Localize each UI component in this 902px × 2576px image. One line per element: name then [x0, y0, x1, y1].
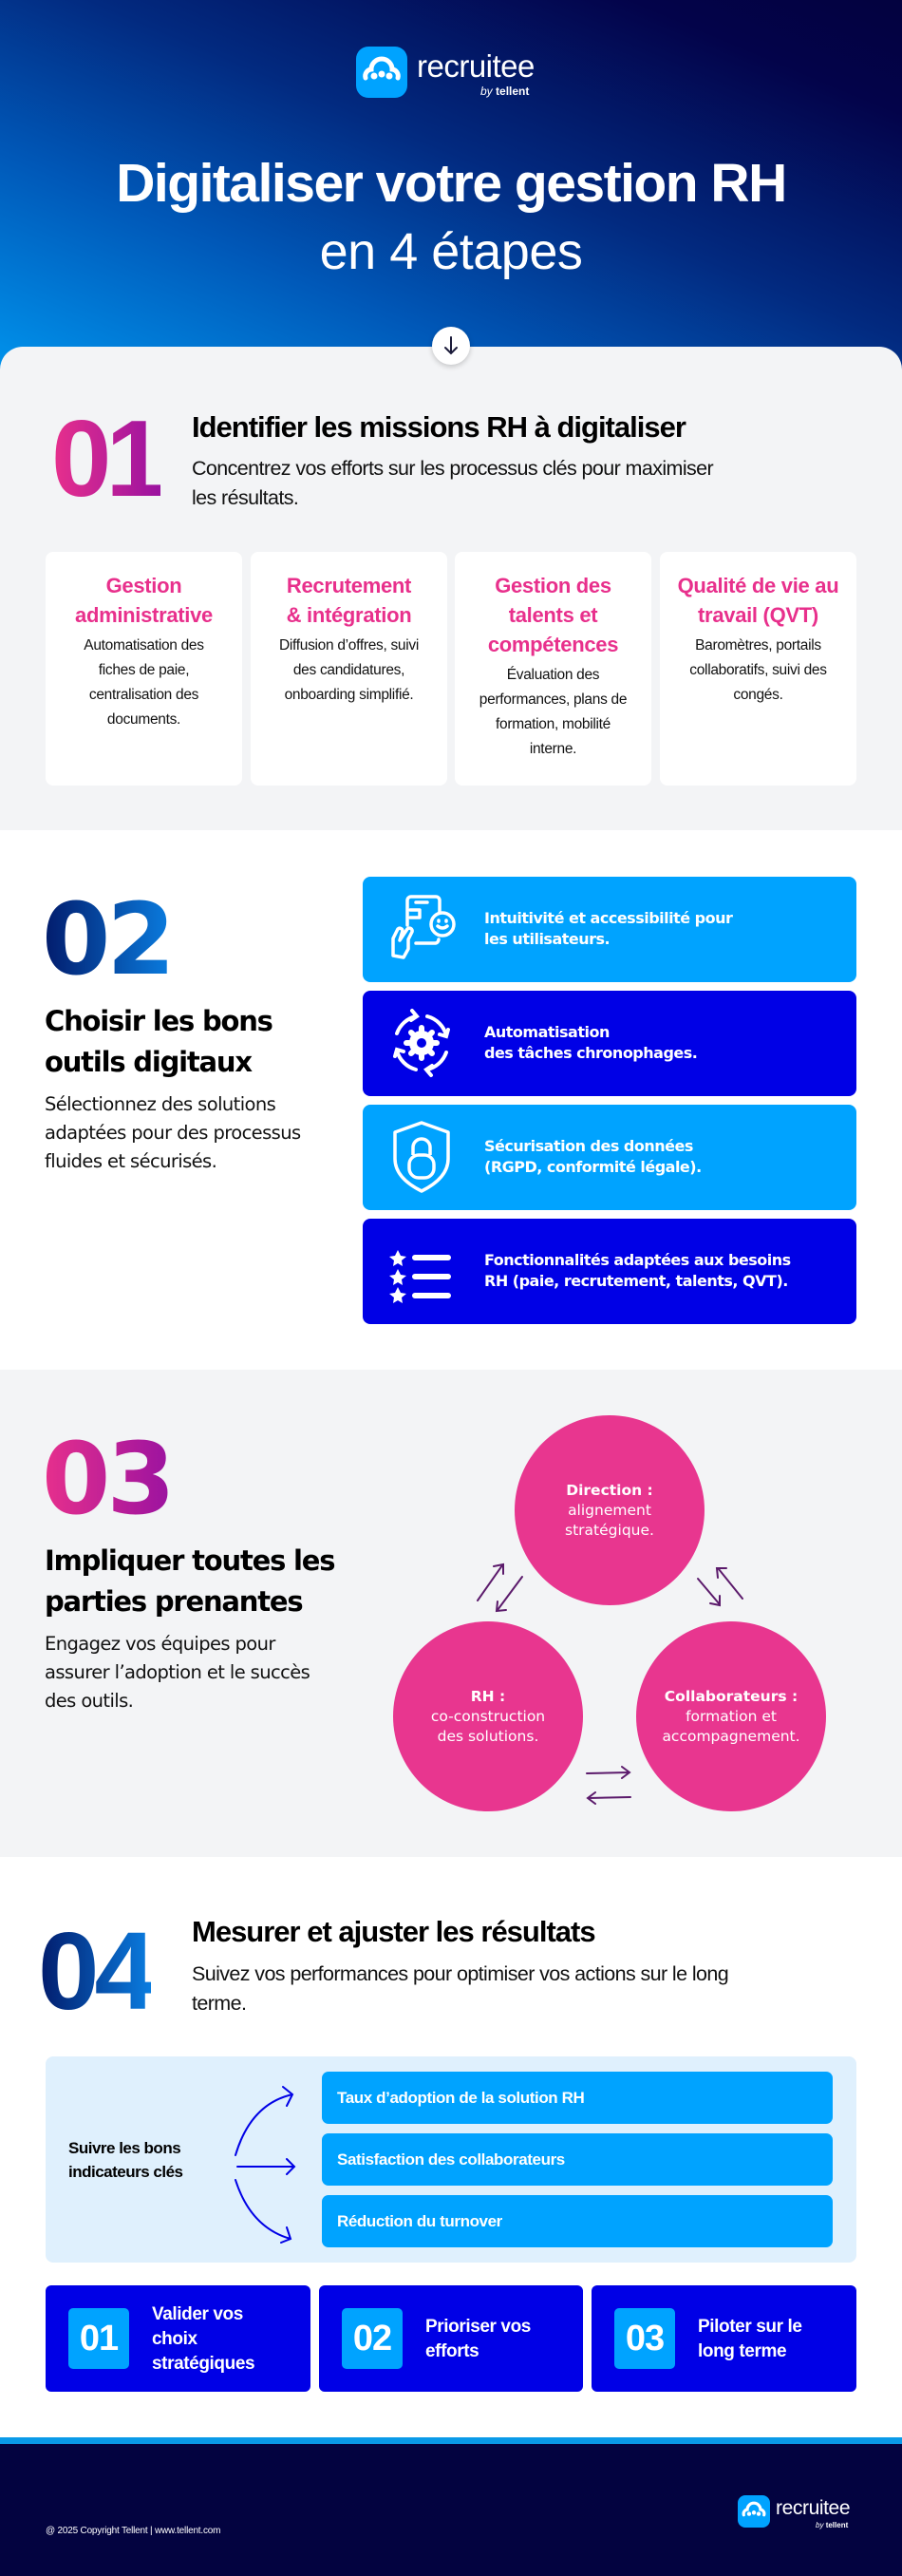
bar: satisfaction: [322, 2133, 833, 2186]
circle: direction: [515, 1415, 705, 1605]
card: talents: performances, plans de: [479, 691, 627, 708]
tool: fonctionnalités: Fonctionnalités adaptées aux besoins: [484, 1251, 791, 1269]
card: prioriser: [319, 2285, 583, 2392]
text 03: assurer l’adoption et le succès: [45, 1661, 310, 1683]
tool: sécurisation: [363, 1105, 856, 1210]
circle: collaborateurs: [636, 1621, 826, 1811]
tool: intuitivité: [363, 877, 856, 982]
card: recrutement: onboarding simplifié.: [285, 687, 413, 703]
card: talents: Évaluation des: [507, 667, 599, 683]
circle: direction: Direction :: [566, 1482, 653, 1499]
card: piloter: [592, 2285, 856, 2392]
card: valider: stratégiques: [152, 2354, 254, 2374]
footer: [0, 2437, 902, 2576]
heading 03: parties prenantes: [45, 1585, 302, 1618]
text 03: Engagez vos équipes pour: [45, 1633, 275, 1655]
logo: footer: [738, 2495, 850, 2529]
circle: collaborateurs: Collaborateurs :: [665, 1687, 798, 1704]
card: talents: interne.: [530, 741, 576, 757]
tool: automatisation: [363, 991, 856, 1096]
heading 02: outils digitaux: [45, 1046, 252, 1078]
card: valider: choix: [152, 2329, 197, 2349]
card: recrutement: [251, 552, 447, 786]
arrows: branches: [235, 2086, 296, 2244]
tool: intuitivité: Intuitivité et accessibilité pour: [484, 909, 732, 927]
card: QVT: Baromètres, portails: [695, 637, 821, 653]
circle: direction: alignement: [568, 1501, 651, 1518]
heading 03: [45, 1544, 334, 1618]
bar: turnover: [322, 2195, 833, 2247]
card: QVT: collaboratifs, suivi des: [689, 662, 827, 678]
logo: recruitee: by tellent: [480, 85, 529, 98]
card: recrutement: & intégration: [287, 603, 411, 627]
panel: section 1: [0, 347, 902, 830]
label: suivre: [68, 2139, 183, 2181]
card: talents: compétences: [488, 633, 618, 656]
card: talents: formation, mobilité: [496, 716, 611, 732]
tool: sécurisation: Sécurisation des données: [484, 1137, 693, 1155]
circle: RH: [393, 1621, 583, 1811]
heading 04: Mesurer et ajuster les résultats: [192, 1915, 595, 1948]
tool: fonctionnalités: [363, 1219, 856, 1324]
text 02: Sélectionnez des solutions: [45, 1093, 275, 1115]
text 03: [45, 1633, 310, 1712]
circle: RH: des solutions.: [438, 1727, 538, 1744]
logo: footer: by tellent: [816, 2521, 848, 2529]
number 04: 04: [38, 1909, 151, 2033]
card: valider: Valider vos: [152, 2304, 243, 2324]
card: gestion administrative: centralisation des: [89, 687, 198, 703]
header background: [0, 0, 902, 380]
text 04: terme.: [192, 1992, 246, 2015]
label: suivre: indicateurs clés: [68, 2163, 183, 2181]
card: QVT: [660, 552, 856, 786]
number 02: 02: [42, 881, 172, 997]
icon: logo cloud: [356, 47, 407, 98]
arrows: cycle: [477, 1563, 743, 1805]
text 04: Suivez vos performances pour optimiser vos actions sur le long: [192, 1962, 728, 1985]
heading 01: Identifier les missions RH à digitaliser: [192, 410, 686, 444]
card: gestion administrative: documents.: [107, 711, 180, 728]
tool: automatisation: Automatisation: [484, 1023, 610, 1041]
heading 02: [45, 1005, 272, 1078]
card: QVT: congés.: [733, 687, 783, 703]
card: talents: [455, 552, 651, 786]
logo: footer: recruitee: [776, 2497, 850, 2519]
bar: satisfaction: Satisfaction des collaborateurs: [337, 2150, 565, 2169]
card: recrutement: Diffusion d’offres, suivi: [279, 637, 419, 653]
text 04: [192, 1962, 728, 2015]
card: gestion administrative: fiches de paie,: [99, 662, 189, 678]
card: prioriser: 02: [353, 2319, 391, 2358]
bar: turnover: Réduction du turnover: [337, 2212, 502, 2230]
text 02: fluides et sécurisés.: [45, 1150, 216, 1172]
text 03: des outils.: [45, 1690, 133, 1712]
label: suivre: Suivre les bons: [68, 2139, 180, 2157]
card: valider: [46, 2285, 310, 2392]
circle: RH: RH :: [471, 1687, 505, 1704]
tool: intuitivité: les utilisateurs.: [484, 930, 610, 948]
title: [116, 153, 786, 280]
title: Digitaliser votre gestion RH: [116, 153, 786, 214]
card: talents: Gestion des: [495, 574, 611, 597]
logo: recruitee: recruitee: [417, 48, 535, 84]
text 01: les résultats.: [192, 486, 298, 509]
text 02: [45, 1093, 301, 1172]
tool: automatisation: des tâches chronophages.: [484, 1044, 697, 1062]
card: prioriser: efforts: [425, 2341, 479, 2361]
logo: recruitee: [356, 47, 535, 98]
title: en 4 étapes: [320, 223, 582, 280]
panel: indicateurs: [46, 2056, 856, 2263]
card: QVT: Qualité de vie au: [678, 574, 838, 597]
text 02: adaptées pour des processus: [45, 1122, 301, 1144]
card: recrutement: des candidatures,: [293, 662, 404, 678]
card: gestion administrative: [46, 552, 242, 786]
panel: section 3: [0, 1370, 902, 1857]
card: talents: talents et: [509, 603, 597, 627]
card: piloter: long terme: [698, 2341, 786, 2361]
copyright: @ 2025 Copyright Tellent | www.tellent.com: [46, 2526, 220, 2536]
text 01: [192, 457, 714, 509]
heading 02: Choisir les bons: [45, 1005, 272, 1037]
circle: RH: co-construction: [431, 1708, 545, 1725]
circle: collaborateurs: accompagnement.: [662, 1727, 800, 1744]
card: valider: 01: [80, 2319, 118, 2358]
card: prioriser: Prioriser vos: [425, 2317, 531, 2337]
card: piloter: 03: [626, 2319, 664, 2358]
text 01: Concentrez vos efforts sur les processus clés pour maximiser: [192, 457, 713, 480]
icon: down arrow: [432, 327, 470, 365]
card: piloter: Piloter sur le: [698, 2317, 801, 2337]
card: recrutement: Recrutement: [287, 574, 411, 597]
circle: direction: stratégique.: [565, 1522, 654, 1539]
bar: adoption: Taux d’adoption de la solution RH: [337, 2089, 584, 2107]
card: gestion administrative: Gestion: [106, 574, 181, 597]
heading 03: Impliquer toutes les: [45, 1544, 334, 1577]
circle: collaborateurs: formation et: [686, 1708, 777, 1725]
number 03: 03: [42, 1421, 172, 1537]
card: gestion administrative: Automatisation des: [84, 637, 204, 653]
card: gestion administrative: administrative: [75, 603, 213, 627]
bar: adoption: [322, 2072, 833, 2124]
card: QVT: travail (QVT): [698, 603, 818, 627]
tool: fonctionnalités: RH (paie, recrutement, talents, QVT).: [484, 1272, 788, 1290]
number 01: 01: [51, 399, 160, 520]
tool: sécurisation: (RGPD, conformité légale).: [484, 1158, 702, 1176]
